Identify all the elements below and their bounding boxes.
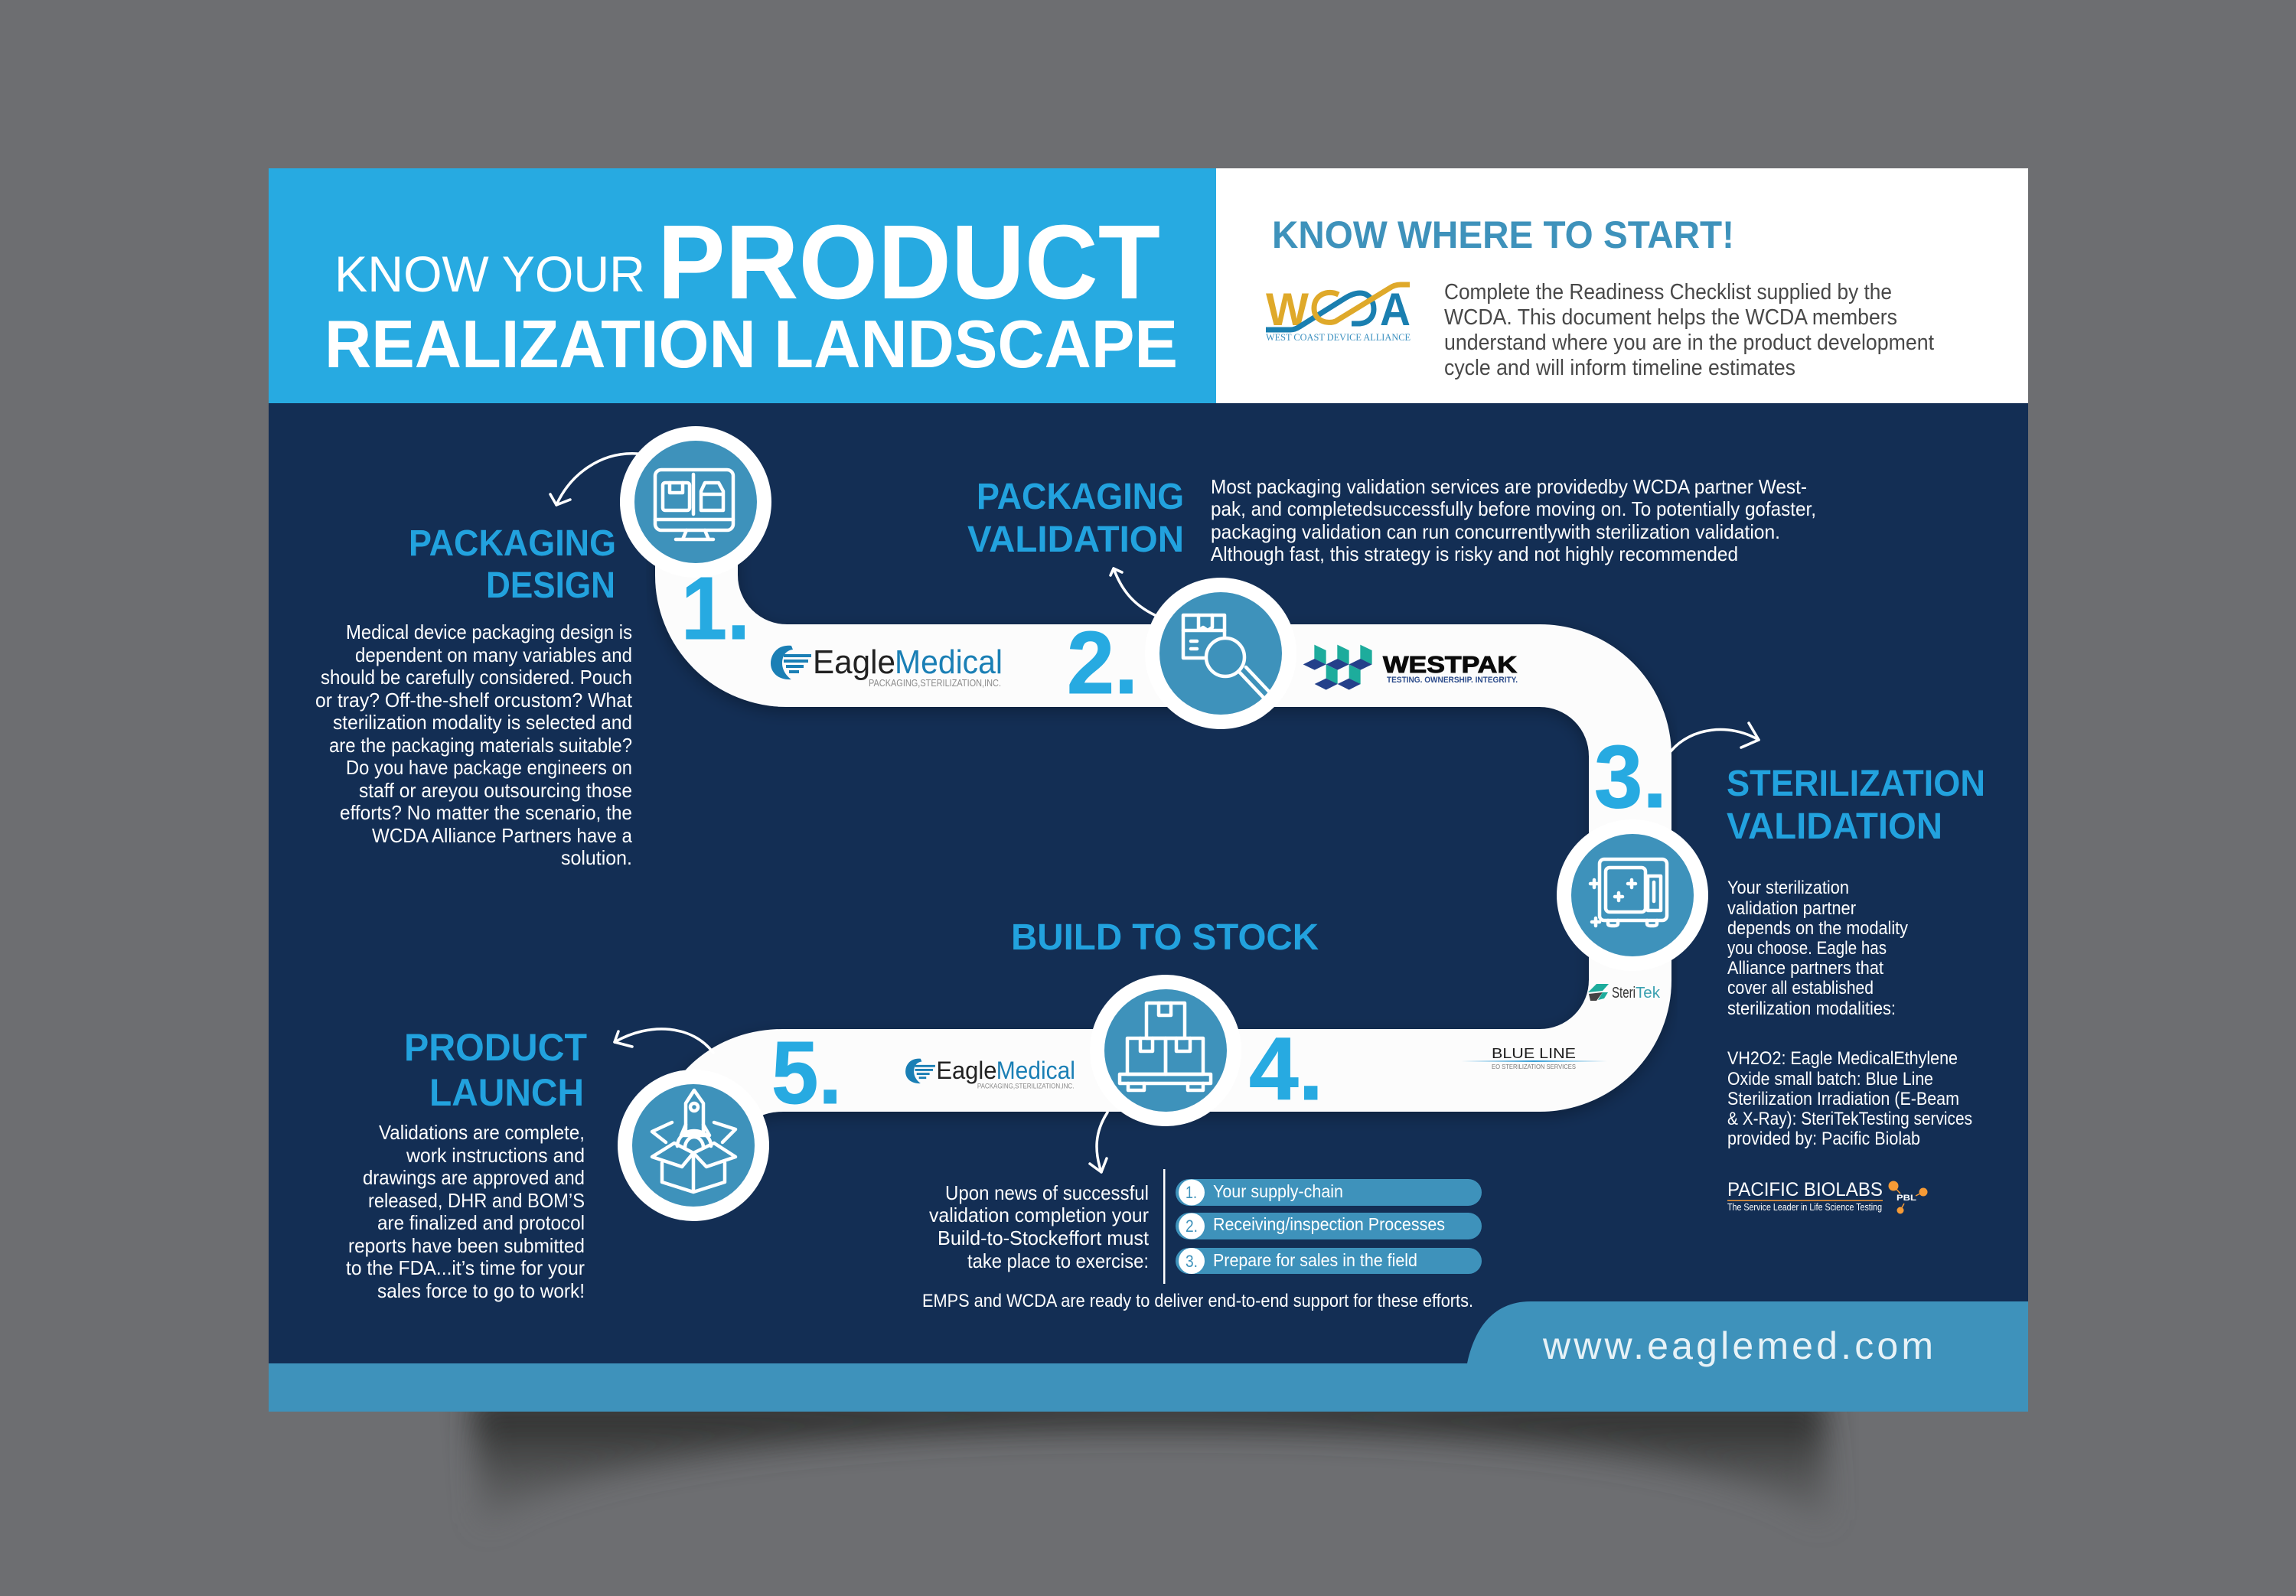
logo: WCDA — [1266, 284, 1411, 343]
list item 2: 2. — [1186, 1217, 1198, 1236]
text: packaging design: staff or areyou outsourcing those — [359, 779, 632, 802]
logo: Pacific Biolabs: PACIFIC BIOLABS — [1727, 1179, 1883, 1200]
text: sterilization partner: validation partner — [1727, 898, 1856, 919]
arrow: to product launch — [615, 1029, 713, 1053]
logo: Eagle Medical (top) — [771, 643, 1003, 689]
heading: sterilization validation: STERILIZATION — [1727, 764, 1985, 804]
text: product launch: drawings are approved and — [363, 1166, 585, 1189]
text: packaging design: efforts? No matter the scenario, the — [340, 801, 632, 824]
logo: Eagle Medical (bottom): Eagle — [936, 1057, 996, 1084]
heading: packaging validation — [967, 477, 1184, 560]
heading: know where to start: KNOW WHERE TO START! — [1272, 213, 1734, 256]
step 3 icon: sterilizer — [1557, 819, 1708, 971]
panel: dark navy body — [269, 403, 2028, 1412]
text: packaging design — [315, 620, 633, 869]
panel: know where to start — [1216, 168, 2028, 403]
logo: SteriTek: Tek — [1636, 985, 1661, 1002]
text: build to stock intro — [929, 1181, 1150, 1272]
text: build to stock intro: Build-to-Stockeffort must — [938, 1226, 1150, 1249]
text: packaging design: solution. — [561, 846, 632, 869]
step 5 number: 5. — [771, 1023, 842, 1122]
text: sterilization modalities: provided by: Pacific Biolab — [1727, 1129, 1920, 1149]
heading: product launch — [404, 1026, 587, 1114]
logo: Blue Line: EO STERILIZATION SERVICES — [1492, 1063, 1576, 1070]
text: packaging validation — [1211, 475, 1816, 565]
text: sterilization modalities: Sterilization Irradiation (E-Beam — [1727, 1089, 1959, 1109]
text: product launch: work instructions and — [406, 1144, 585, 1167]
heading: packaging design — [409, 523, 616, 606]
text: packaging design: sterilization modality is selected and — [333, 711, 632, 734]
text: packaging validation: Most packaging validation services are providedby WCDA partner West- — [1211, 475, 1807, 498]
heading: sterilization validation: VALIDATION — [1727, 806, 1942, 847]
title line: know your: KNOW YOUR — [334, 246, 645, 302]
text: sterilization modalities — [1727, 1048, 1972, 1149]
text: build to stock intro: validation completion your — [929, 1204, 1149, 1226]
text: sterilization partner: sterilization modalities: — [1727, 998, 1896, 1019]
text: packaging design: Medical device packaging design is — [346, 620, 632, 643]
list item 3 — [1176, 1248, 1482, 1274]
arrow: to build to stock text — [1090, 1112, 1107, 1172]
panel: header title — [269, 168, 1216, 403]
list: exercise items — [1176, 1179, 1482, 1274]
heading: sterilization validation — [1727, 764, 1985, 847]
text: product launch: to the FDA...it’s time for your — [346, 1256, 585, 1279]
step 2 number: 2. — [1067, 613, 1138, 712]
text: product launch: released, DHR and BOM’S — [368, 1189, 585, 1212]
website url: www.eaglemed.com — [1542, 1324, 1933, 1367]
text: readiness checklist: WCDA. This document helps the WCDA members — [1444, 305, 1897, 330]
text: sterilization partner: you choose. Eagle has — [1727, 938, 1887, 959]
step 5 icon: rocket in box — [618, 1070, 769, 1221]
arrow: to packaging validation — [1110, 568, 1155, 615]
text: product launch: Validations are complete, — [379, 1121, 585, 1144]
text: sterilization partner: depends on the modality — [1727, 918, 1908, 939]
logo: Eagle Medical (top): PACKAGING,STERILIZATION,INC. — [869, 677, 1001, 689]
step 4 icon: boxes on pallet — [1090, 975, 1241, 1126]
heading: packaging design: PACKAGING — [409, 523, 616, 564]
heading: product launch: LAUNCH — [429, 1071, 584, 1114]
heading: packaging validation: VALIDATION — [967, 520, 1184, 560]
logo: Eagle Medical (top): Eagle — [813, 643, 895, 681]
text: packaging design: Do you have package engineers on — [346, 756, 632, 779]
list item 1 — [1176, 1179, 1482, 1206]
logo: Eagle Medical (bottom) — [905, 1057, 1075, 1091]
panel: footer band — [269, 1301, 2028, 1412]
logo: Blue Line — [1461, 1046, 1607, 1070]
logo: Eagle Medical (bottom): Medical — [996, 1057, 1075, 1084]
text: packaging validation: packaging validation can run concurrentlywith sterilization validation. — [1211, 520, 1780, 543]
card drop shadow — [471, 1396, 1825, 1526]
heading: build to stock: BUILD TO STOCK — [1011, 917, 1319, 958]
text: packaging design: should be carefully considered. Pouch — [321, 666, 632, 689]
logo: Eagle Medical (top): Medical — [895, 643, 1003, 681]
logo: SteriTek: Steri — [1612, 985, 1636, 1002]
text: packaging design: WCDA Alliance Partners have a — [372, 824, 632, 847]
step 1 icon: monitor with packaging — [620, 426, 771, 578]
logo: WCDA: W — [1266, 284, 1309, 335]
list item 1: Your supply-chain — [1213, 1181, 1343, 1201]
text: packaging design: or tray? Off-the-shelf orcustom? What — [315, 689, 633, 712]
logo: Pacific Biolabs — [1727, 1179, 1927, 1213]
logo: WCDA: A — [1380, 284, 1411, 335]
text: EMPS and WCDA: EMPS and WCDA are ready to deliver end-to-end support for these efforts. — [922, 1291, 1473, 1311]
logo: Eagle Medical (bottom): PACKAGING,STERILIZATION,INC. — [977, 1083, 1074, 1091]
text: sterilization modalities: VH2O2: Eagle MedicalEthylene — [1727, 1048, 1958, 1069]
text: readiness checklist — [1444, 280, 1934, 380]
text: sterilization partner: Your sterilization — [1727, 878, 1849, 898]
text: packaging design: dependent on many variables and — [355, 643, 632, 666]
text: readiness checklist: understand where you are in the product development — [1444, 331, 1934, 355]
heading: product launch: PRODUCT — [404, 1026, 587, 1069]
logo: Westpak — [1303, 645, 1518, 690]
step 4 number: 4. — [1249, 1019, 1323, 1119]
list item 3: 3. — [1186, 1252, 1198, 1271]
road path — [693, 536, 1630, 1145]
list item 1: 1. — [1186, 1183, 1197, 1202]
arrow: to packaging design — [550, 454, 638, 505]
text: product launch: sales force to go to work! — [377, 1279, 585, 1302]
heading: packaging design: DESIGN — [486, 565, 615, 606]
arrow: to sterilization validation — [1671, 723, 1759, 751]
logo: Westpak: TESTING. OWNERSHIP. INTEGRITY. — [1387, 676, 1518, 685]
list item 2 — [1176, 1213, 1482, 1239]
step 2 icon: box and magnifier — [1145, 578, 1296, 729]
logo: WCDA: WEST COAST DEVICE ALLIANCE — [1266, 331, 1411, 343]
text: sterilization modalities: Oxide small batch: Blue Line — [1727, 1069, 1933, 1090]
text: packaging validation: pak, and completedsuccessfully before moving on. To potentially gofaster, — [1211, 497, 1816, 520]
text: product launch: reports have been submitted — [348, 1234, 585, 1257]
text: build to stock intro: take place to exercise: — [967, 1249, 1149, 1272]
text: product launch — [346, 1121, 585, 1302]
logo: SteriTek — [1588, 984, 1661, 1002]
text: sterilization partner — [1727, 878, 1908, 1019]
title line: product: PRODUCT — [657, 204, 1160, 321]
text: packaging design: are the packaging materials suitable? — [329, 734, 632, 757]
text: packaging validation: Although fast, this strategy is risky and not highly recommended — [1211, 542, 1738, 565]
logo: Westpak: WESTPAK — [1383, 651, 1518, 678]
title line: realization landscape: REALIZATION LANDSCAPE — [325, 306, 1178, 382]
text: readiness checklist: Complete the Readiness Checklist supplied by the — [1444, 280, 1892, 305]
step 3 number: 3. — [1594, 727, 1667, 826]
logo: Blue Line: BLUE LINE — [1492, 1046, 1576, 1061]
heading: packaging validation: PACKAGING — [977, 477, 1184, 517]
list item 3: Prepare for sales in the field — [1213, 1250, 1417, 1270]
logo: Pacific Biolabs: PBL — [1896, 1194, 1916, 1203]
text: sterilization partner: Alliance partners that — [1727, 958, 1883, 979]
text: sterilization modalities: & X-Ray): SteriTekTesting services — [1727, 1109, 1972, 1129]
logo: Pacific Biolabs: The Service Leader in Life Science Testing — [1727, 1201, 1882, 1213]
list item 2: Receiving/inspection Processes — [1213, 1214, 1445, 1234]
text: sterilization partner: cover all established — [1727, 978, 1874, 998]
text: build to stock intro: Upon news of successful — [945, 1181, 1149, 1204]
text: readiness checklist: cycle and will inform timeline estimates — [1444, 356, 1795, 380]
step 1 number: 1. — [681, 559, 750, 658]
text: product launch: are finalized and protocol — [377, 1211, 585, 1234]
